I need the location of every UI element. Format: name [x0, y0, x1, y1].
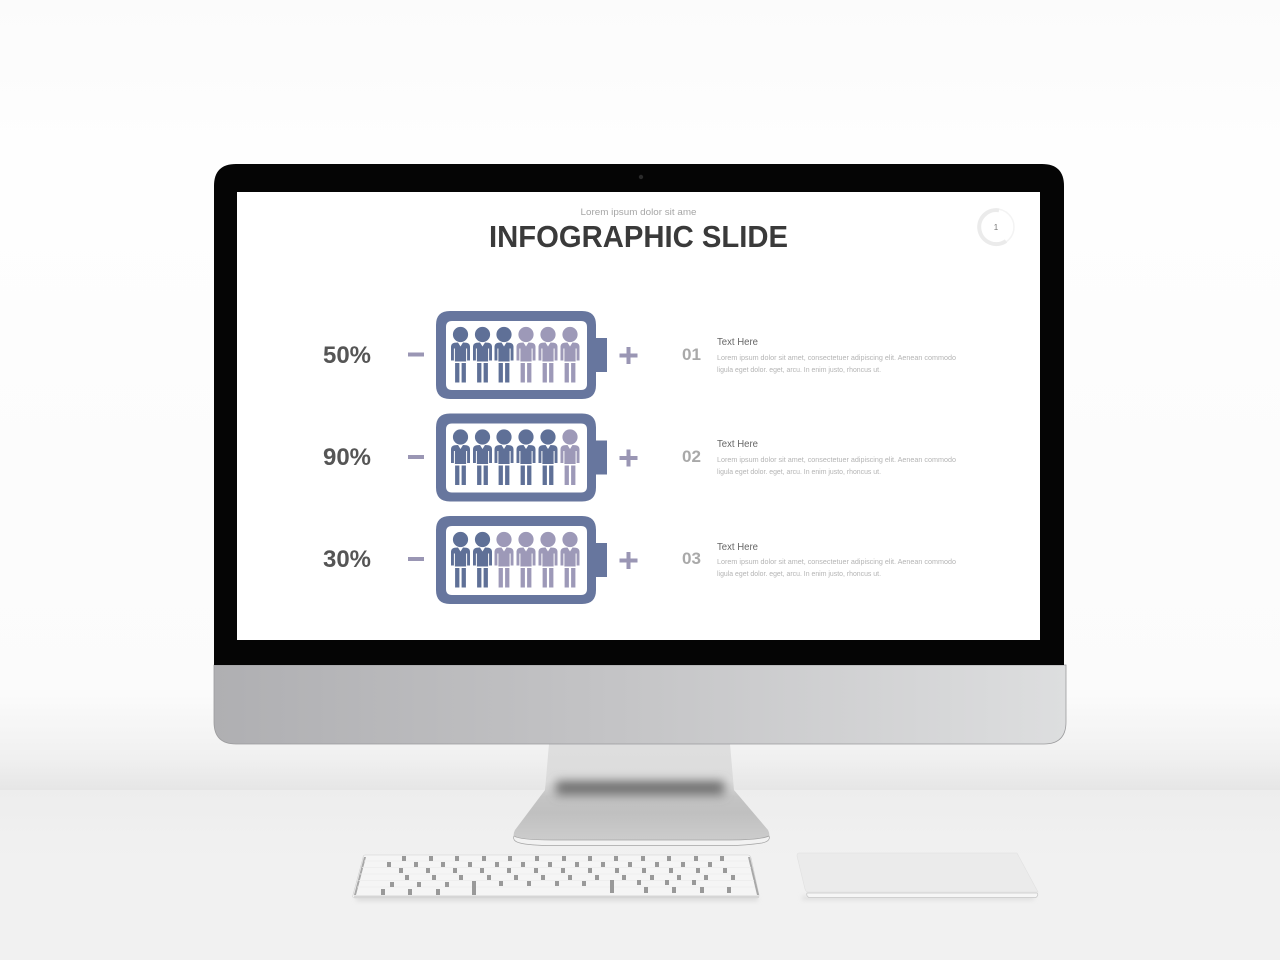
slide subtitle: Lorem ipsum dolor sit ame [580, 207, 696, 218]
description 2 [717, 439, 956, 476]
description 2: Text Here [717, 439, 758, 450]
minus sign [408, 455, 424, 459]
row 3 [323, 516, 956, 604]
number 03: 03 [682, 549, 701, 568]
percentage 90%: 90% [323, 444, 371, 471]
description 1: Lorem ipsum dolor sit amet, consectetuer adipiscing elit. Aenean commodo [717, 353, 956, 362]
percentage 50%: 50% [323, 342, 371, 369]
monitor body [214, 164, 1066, 744]
page number ring: 1 [994, 223, 999, 232]
camera [639, 175, 643, 179]
row 2 [323, 414, 956, 502]
monitor chin [214, 665, 1066, 744]
slide title: INFOGRAPHIC SLIDE [489, 219, 788, 254]
battery icon 30% [436, 516, 607, 604]
plus sign [620, 347, 638, 364]
keyboard [353, 855, 759, 901]
plus sign [620, 552, 638, 569]
trackpad [797, 853, 1038, 900]
screen [237, 192, 1040, 640]
description 3: ligula eget dolor. eget, arcu. In enim justo, rhoncus ut. [717, 569, 881, 578]
page number ring [978, 209, 1014, 245]
plus sign [620, 450, 638, 466]
description 3: Lorem ipsum dolor sit amet, consectetuer adipiscing elit. Aenean commodo [717, 557, 956, 566]
number 02: 02 [682, 447, 701, 466]
description 1 [717, 337, 956, 374]
description 1: ligula eget dolor. eget, arcu. In enim justo, rhoncus ut. [717, 365, 881, 374]
description 2: Lorem ipsum dolor sit amet, consectetuer adipiscing elit. Aenean commodo [717, 455, 956, 464]
desk surface [0, 790, 1280, 960]
description 2: ligula eget dolor. eget, arcu. In enim justo, rhoncus ut. [717, 467, 881, 476]
monitor bezel [214, 164, 1064, 665]
battery icon 50% [436, 311, 607, 399]
row 1 [323, 311, 956, 399]
battery icon 90% [436, 414, 607, 502]
number 01: 01 [682, 345, 701, 364]
description 3 [717, 542, 956, 578]
description 3: Text Here [717, 542, 758, 553]
monitor stand [514, 744, 769, 846]
minus sign [408, 557, 424, 561]
minus sign [408, 352, 424, 356]
description 1: Text Here [717, 337, 758, 348]
percentage 30%: 30% [323, 546, 371, 573]
